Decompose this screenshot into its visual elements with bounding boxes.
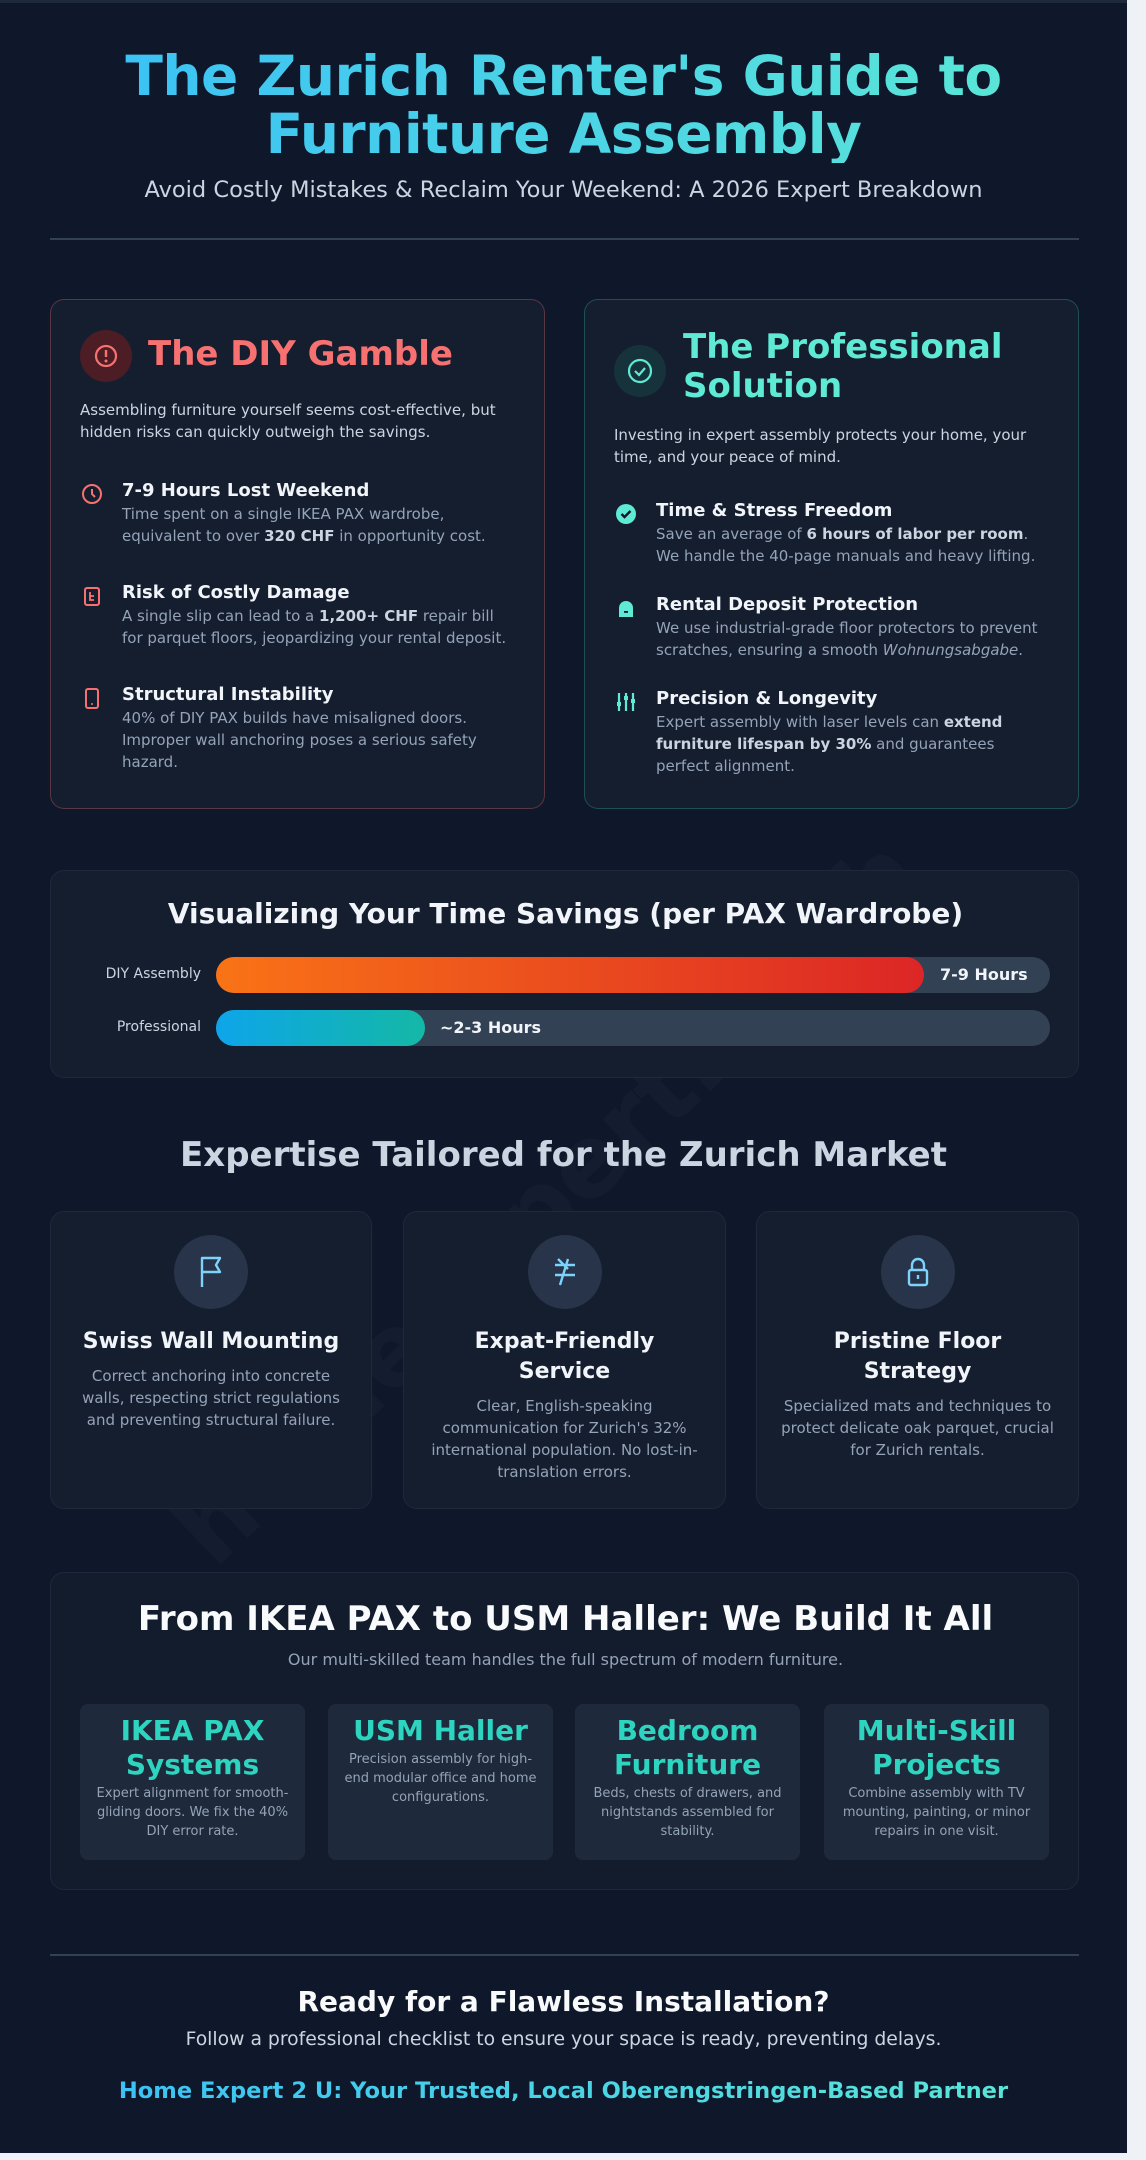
heading: professional: The Professional (683, 327, 1002, 367)
panel: pristine floor: Strategy (864, 1359, 971, 1384)
item: precision: furniture lifespan by 30% and guarantees (656, 735, 994, 753)
heading: DIY: The DIY Gamble (148, 334, 453, 374)
heading: expertise: Expertise Tailored for the Zurich Market (180, 1135, 947, 1175)
item: precision (617, 688, 1002, 775)
item: time freedom: We handle the 40-page manuals and heavy lifting. (656, 547, 1035, 565)
bar: DIY: DIY Assembly (106, 966, 201, 982)
item: precision: Precision & Longevity (656, 688, 877, 709)
panel: swiss wall mounting: walls, respecting strict regulations (82, 1389, 340, 1407)
card: bedroom: Furniture (614, 1748, 761, 1781)
card: IKEA PAX: Systems (126, 1748, 259, 1781)
panel: swiss wall mounting: Swiss Wall Mounting (83, 1329, 339, 1354)
item: damage (84, 582, 506, 647)
item: damage: Risk of Costly Damage (122, 582, 350, 603)
card: multi-skill: Projects (872, 1748, 1001, 1781)
item: hours lost: 7-9 Hours Lost Weekend (122, 480, 369, 501)
card: bedroom: Bedroom (617, 1714, 758, 1747)
intro text (614, 426, 1026, 466)
item: instability: Improper wall anchoring poses a serious safety (122, 731, 477, 749)
card: multi-skill (824, 1704, 1049, 1860)
icon: alert (80, 330, 132, 382)
item: deposit: We use industrial-grade floor protectors to prevent (656, 619, 1038, 637)
panel: expat friendly: Clear, English-speaking (476, 1397, 652, 1415)
title: Furniture Assembly (266, 102, 861, 166)
card: multi-skill: mounting, painting, or minor (843, 1805, 1030, 1820)
icon: check circle (614, 345, 666, 397)
card: bedroom: Beds, chests of drawers, and (593, 1786, 782, 1801)
panel: expat friendly: Service (519, 1359, 610, 1384)
brand line: Home Expert 2 U: Your Trusted, Local Oberengstringen-Based Partner (119, 2078, 1008, 2104)
item: deposit: scratches, ensuring a smooth Wohnungsabgabe. (656, 641, 1023, 659)
intro text: Investing in expert assembly protects your home, your (614, 426, 1026, 444)
section subtitle: Our multi-skilled team handles the full spectrum of modern furniture. (288, 1650, 843, 1669)
panel: expat friendly: international population. No lost-in- (431, 1441, 698, 1459)
panel: professional solution (584, 299, 1079, 809)
item: hours lost (82, 480, 486, 545)
CTA heading: Ready for a Flawless Installation? (297, 1985, 830, 2018)
item: hours lost: equivalent to over 320 CHF in opportunity cost. (122, 527, 486, 545)
chart title: Visualizing Your Time Savings (per PAX Wardrobe) (168, 897, 963, 930)
panel: swiss wall mounting (50, 1211, 372, 1509)
panel: expat friendly (403, 1211, 726, 1509)
bar: DIY: 7-9 Hours (940, 965, 1028, 984)
item: deposit (619, 594, 1038, 659)
item: instability: 40% of DIY PAX builds have misaligned doors. (122, 709, 467, 727)
heading: professional: Solution (683, 366, 842, 406)
panel: pristine floor (756, 1211, 1079, 1509)
panel: expat friendly: translation errors. (497, 1463, 632, 1481)
card: bedroom: nightstands assembled for (601, 1805, 774, 1820)
item: time freedom: Time & Stress Freedom (656, 500, 892, 521)
card: multi-skill: repairs in one visit. (874, 1824, 999, 1839)
card: multi-skill: Multi-Skill (857, 1714, 1016, 1747)
panel: expat friendly: communication for Zurich's 32% (442, 1419, 687, 1437)
panel: expat friendly: Expat-Friendly (475, 1329, 654, 1354)
item: precision: Expert assembly with laser levels can extend (656, 713, 1002, 731)
card: multi-skill: Combine assembly with TV (848, 1786, 1025, 1801)
panel: pristine floor: protect delicate oak parquet, crucial (781, 1419, 1054, 1437)
bar: professional (117, 1010, 1050, 1046)
bar: professional: Professional (117, 1019, 201, 1035)
panel: time savings chart (50, 870, 1079, 1078)
bar: professional: ~2-3 Hours (440, 1018, 541, 1037)
icon: lock (880, 1235, 954, 1309)
icon: flag (174, 1235, 248, 1309)
card: bedroom: stability. (660, 1824, 714, 1839)
card: IKEA PAX: DIY error rate. (146, 1824, 239, 1839)
card: USM Haller: Precision assembly for high- (349, 1752, 532, 1767)
item: instability: hazard. (122, 753, 178, 771)
panel: we build it all (50, 1572, 1079, 1890)
card: IKEA PAX: Expert alignment for smooth- (97, 1786, 288, 1801)
item: instability (85, 684, 477, 771)
heading: professional (683, 327, 1002, 406)
item: deposit: Rental Deposit Protection (656, 594, 918, 615)
bar: DIY (106, 957, 1050, 993)
card: USM Haller: end modular office and home (344, 1771, 537, 1786)
intro text (80, 401, 496, 441)
panel: DIY gamble (50, 299, 545, 809)
panel: pristine floor: Pristine Floor (834, 1329, 1001, 1354)
card: IKEA PAX: IKEA PAX (121, 1714, 264, 1747)
panel: swiss wall mounting: Correct anchoring into concrete (92, 1367, 330, 1385)
title (0, 47, 1127, 163)
card: IKEA PAX (80, 1704, 305, 1860)
item: time freedom: Save an average of 6 hours of labor per room. (656, 525, 1028, 543)
subtitle: Avoid Costly Mistakes & Reclaim Your Weekend: A 2026 Expert Breakdown (145, 177, 982, 203)
item: instability: Structural Instability (122, 684, 334, 705)
item: damage: for parquet floors, jeopardizing your rental deposit. (122, 629, 506, 647)
intro text: hidden risks can quickly outweigh the savings. (80, 423, 430, 441)
card: USM Haller: configurations. (392, 1790, 489, 1805)
panel: pristine floor: Specialized mats and techniques to (784, 1397, 1051, 1415)
card: IKEA PAX: gliding doors. We fix the 40% (97, 1805, 288, 1820)
item: damage: A single slip can lead to a 1,200+ CHF repair bill (122, 607, 494, 625)
panel: swiss wall mounting: and preventing structural failure. (87, 1411, 335, 1429)
CTA text: Follow a professional checklist to ensure your space is ready, preventing delays. (186, 2029, 941, 2050)
intro text: time, and your peace of mind. (614, 448, 841, 466)
card: bedroom (575, 1704, 800, 1860)
card: USM Haller: USM Haller (353, 1714, 528, 1747)
item: precision: perfect alignment. (656, 757, 795, 775)
section title: From IKEA PAX to USM Haller: We Build It All (138, 1599, 993, 1639)
item: time freedom (616, 500, 1035, 565)
icon: translate (528, 1235, 602, 1309)
panel: pristine floor: for Zurich rentals. (850, 1441, 985, 1459)
watermark: homeexpert2u.ch (150, 815, 943, 1587)
intro text: Assembling furniture yourself seems cost-effective, but (80, 401, 496, 419)
title: The Zurich Renter's Guide to (125, 44, 1002, 108)
card: USM Haller (328, 1704, 553, 1860)
item: hours lost: Time spent on a single IKEA PAX wardrobe, (122, 505, 444, 523)
